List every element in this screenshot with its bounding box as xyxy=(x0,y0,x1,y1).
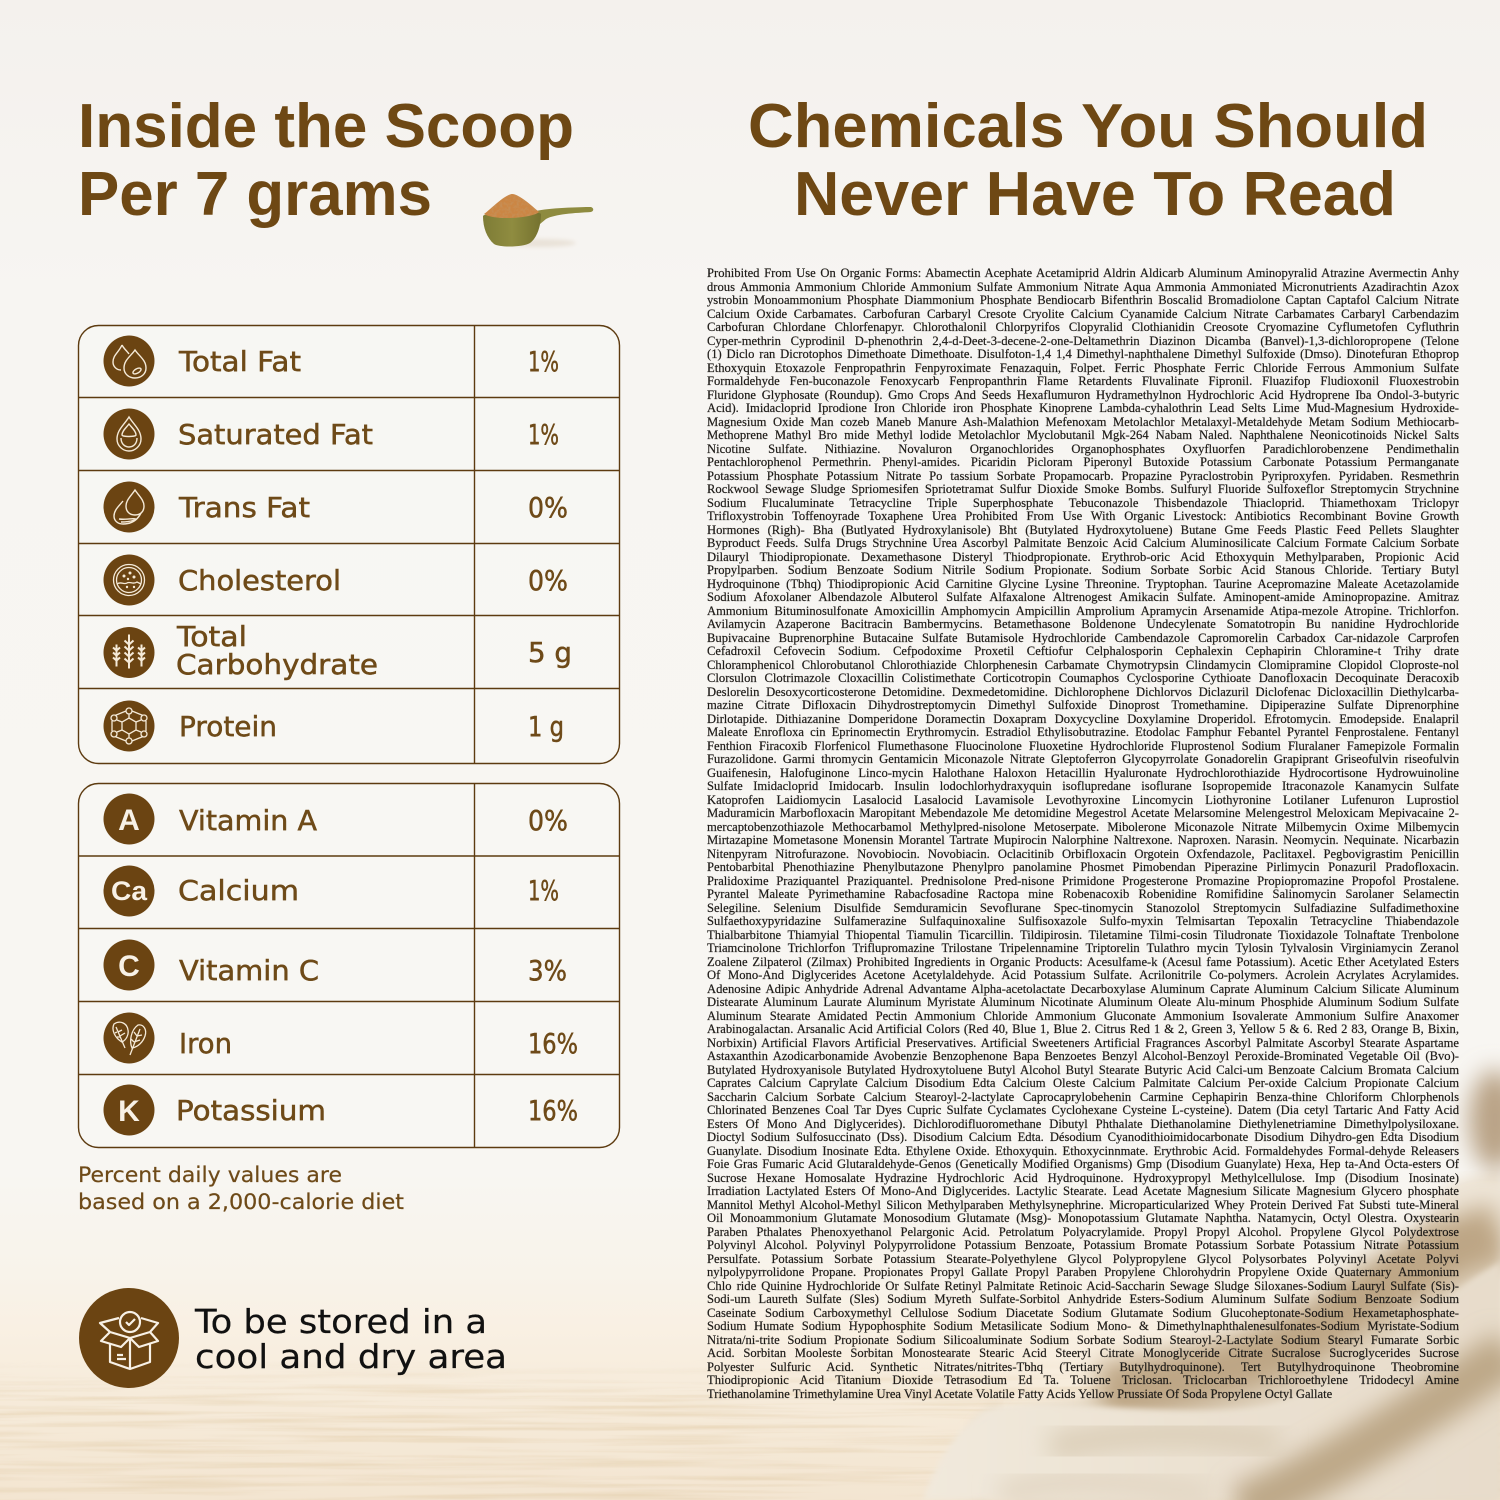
row: Total Carbohydrate xyxy=(104,621,572,681)
text block: prohibited chemicals list: Acid). Imidacloprid Iprodione Iron Chloride iron Phosphate Kinoprene Lambda-cyhalothrin Lead Selts Lime Mud-Magnesium Hydroxide- xyxy=(707,401,1459,415)
text block: prohibited chemicals list: Dioctyl Sodium Sulfosuccinato (Dss). Disodium Calcium Edta. Désodium Cyanodithioimidocarbonate Disodium Dihydro-gen Edta Disodium xyxy=(707,1130,1459,1144)
text block: prohibited chemicals list: Nitenpyram Nitrofurazone. Novobiocin. Novobiacin. Oclacitinib Orbifloxacin Orgotein Oxfendazole, Paclitaxel. Pegbovigrastim Penicillin xyxy=(707,846,1459,860)
text block: prohibited chemicals list: Guaifenesin, Halofuginone Linco-mycin Halothane Haloxon Hetacillin Hyaluronate Hydrochlorothiazide Hydrocortisone Hydrowuinoline xyxy=(707,766,1459,780)
text block: prohibited chemicals list: Carbofuran Chlordane Chlorfenapyr. Chlorothalonil Chlorpyrifos Clopyralid Clothianidin Creosote Cryomazine Cyflumetofen Cyfluthrin xyxy=(707,320,1459,334)
row: Protein: Protein xyxy=(179,711,277,743)
text block: prohibited chemicals list: Furazolidone. Garmi thromycin Gentamicin Miconazole Nitrate Gleptoferron Glycopyrrolate Gonadorelin Grapiprant Griseofulvin riseofulvin xyxy=(707,752,1459,766)
row: Vitamin A: 0% xyxy=(528,805,568,837)
row: Calcium: Ca xyxy=(111,876,148,906)
text block: prohibited chemicals list: Caprates Calcium Caprylate Calcium Disodium Edta Calcium Oleste Calcium Palmitate Calcium Per-oxide Calcium Propionate Calcium xyxy=(707,1076,1459,1090)
text block: prohibited chemicals list: (1) Diclo ran Dicrotophos Dimethoate Dimethoate. Disulfoton-1,4 1,4 Dimethyl-naphthalene Dimethyl Sulfoxide (Dmso). Dinotefuran Ethoprop xyxy=(707,347,1459,361)
text block: prohibited chemicals list: Chlo ride Quinine Hydrochloride Or Sulfate Retinyl Palmitate Retinoic Acid-Saccharin Sewage Sludge Siloxanes-Sodium Lauryl Sulfate (Sis)- xyxy=(707,1278,1459,1292)
text block: prohibited chemicals list: Adenosine Adipic Anhydride Adrenal Advantame Alpha-acetolactate Decarboxylase Aluminum Caprate Aluminum Calcium Silicate Aluminum xyxy=(707,982,1459,996)
text block: prohibited chemicals list: Caseinate Sodium Carboxymethyl Cellulose Sodium Diacetate Sodium Glutamate Sodium Glucoheptonate-Sodium Hexametaphosphate- xyxy=(707,1306,1459,1320)
text block: prohibited chemicals list: Foie Gras Fumaric Acid Glutaraldehyde-Genos (Genetically Modified Organisms) Gmp (Disodium Guanylate) Hexa, Hep ta-And Octa-esters Of xyxy=(707,1157,1459,1171)
text block: prohibited chemicals list: Norbixin) Artificial Flavors Artificial Preservatives. Artificial Sweeteners Artificial Fragrances Ascorbyl Palmitate Ascorbyl Stearate Aspartame xyxy=(707,1036,1459,1050)
row: Vitamin C: Vitamin C xyxy=(179,955,319,987)
text block: prohibited chemicals list: Pralidoxime Praziquantel Praziquantel. Prednisolone Pred-nisone Primidone Progesterone Promazine Propiopromazine Propofol Prostalene. xyxy=(707,874,1459,888)
row: Total Fat: Total Fat xyxy=(178,346,301,378)
row: Vitamin C: 3% xyxy=(528,955,567,987)
row: Iron: 16% xyxy=(528,1028,578,1060)
text block: prohibited chemicals list: Pentobarbital Phenothiazine Phenylbutazone Phenylpro panolamine Phosmet Pimobendan Piperazine Pirlimycin Ponazuril Pradofloxacin. xyxy=(707,860,1459,874)
text block: prohibited chemicals list: Potassium Phosphate Potassium Nitrate Po tassium Sorbate Propamocarb. Propazine Pyraclostrobin Pyriproxyfen. Pyridaben. Resmethrin xyxy=(707,468,1459,482)
text block: prohibited chemicals list: Polyester Sulfuric Acid. Synthetic Nitrates/nitrites-Tbhq (Tertiary Butylhydroquinone). Tert Butylhydroquinone Theobromine xyxy=(707,1360,1459,1374)
row: Cholesterol: 0% xyxy=(528,565,568,597)
text block: prohibited chemicals list: Distearate Aluminum Laurate Aluminum Myristate Aluminum Nicotinate Aluminum Oleate Alu-minum Phosphide Aluminum Sodium Sulfate xyxy=(707,995,1459,1009)
row: Trans Fat: 0% xyxy=(528,492,568,524)
text block: prohibited chemicals list: drous Ammonia Ammonium Chloride Ammonium Sulfate Ammonium Nitrate Aqua Ammonia Ammoniated Micronutrients Azadirachtin Azox xyxy=(707,280,1459,294)
text block: prohibited chemicals list: Sulfaethoxypyridazine Sulfamerazine Sulfaquinoxaline Sulfisoxazole Sulfo-myxin Telmisartan Tepoxalin Tetracycline Thiabendazole xyxy=(707,914,1459,928)
storage instruction text: To be stored in a xyxy=(194,1302,487,1341)
row: Protein: 1 g xyxy=(528,711,564,743)
text block: prohibited chemicals list: Calcium Oxide Carbamates. Carbofuran Carbaryl Cresote Cryolite Calcium Cyanamide Calcium Nitrate Carbamates Carbaryl Carbendazim xyxy=(707,306,1459,320)
row: Potassium xyxy=(104,1084,578,1136)
text block: prohibited chemicals list: ystrobin Monoammonium Phosphate Diammonium Phosphate Bendiocarb Bifenthrin Boscalid Bromadiolone Captan Captafol Calcium Nitrate xyxy=(707,293,1459,307)
row: Saturated Fat: 1% xyxy=(528,419,559,451)
text block: prohibited chemicals list: Cyper-methrin Cyprodinil D-phenothrin 2,4-d-Deet-3-decene-2-one-Deltamethrin Diazinon Dicamba (Banvel)-1,3-dichloropropene (Telone xyxy=(707,334,1459,348)
row: Total Carbohydrate: Total xyxy=(176,621,247,653)
text block: prohibited chemicals list: Sodi-um Laureth Sulfate (Sles) Sodium Myreth Sulfate-Sorbitol Anhydride Esters-Sodium Aluminum Sulfate Sodium Benzoate Sodium xyxy=(707,1292,1459,1306)
text block: prohibited chemicals list: Esters Of Mono And Diglycerides). Dichlorodifluoromethane Dibutyl Phthalate Diethanolamine Diethylenetriamine Dimethylpolysiloxane. xyxy=(707,1116,1459,1130)
text block: prohibited chemicals list: Fluridone Glyphosate (Roundup). Gmo Crops And Seeds Hexaflumuron Hydramethylnon Hydrochloric Acid Hydroprene Iba Ondol-3-butyric xyxy=(707,388,1459,402)
text block: prohibited chemicals list: Irradiation Lactylated Esters Of Mono-And Diglycerides. Lactylic Stearate. Lead Acetate Magnesium Silicate Magnesium Glycero phosphate xyxy=(707,1184,1459,1198)
text block: prohibited chemicals list: Hydroquinone (Tbhq) Thiodipropionic Acid Carnitine Glycine Lysine Threonine. Tryptophan. Taurine Acepromazine Maleate Acetazolamide xyxy=(707,576,1459,590)
icon: open box with checkmark xyxy=(79,1288,179,1388)
background: cream wall, wood table and blanket xyxy=(0,1058,1500,1500)
text block: prohibited chemicals list: Aluminum Stearate Amidated Pectin Ammonium Chloride Ammonium Gluconate Ammonium Isovalerate Ammonium Sulfire Anaxomer xyxy=(707,1008,1459,1022)
text block: prohibited chemicals list: Sodium Afoxolaner Albendazole Albuterol Sulfate Alfaxalone Altrenogest Amikacin Sulfate. Aminopent-amide Aminopropazine. Amitraz xyxy=(707,590,1459,604)
row: Vitamin A xyxy=(104,794,568,844)
row: Calcium: 1% xyxy=(528,875,559,907)
text block: prohibited chemicals list: Selegiline. Selenium Disulfide Semduramicin Sevoflurane Spec-tinomycin Stanozolol Streptomycin Sulfadiazine Sulfadimethoxine xyxy=(707,900,1459,914)
text block: prohibited chemicals list: Hormones (Righ)- Bha (Butlyated Hydroxylanisole) Bht (Butylated Hydroxytoluene) Butane Gme Feeds Plastic Feed Pellets Slaughter xyxy=(707,522,1459,536)
text block: prohibited chemicals list: Formaldehyde Fen-buconazole Fenoxycarb Fenpropanthrin Flame Retardents Fluvalinate Fipronil. Fluazifop Fludioxonil Fluoxestrobin xyxy=(707,374,1459,388)
text block: prohibited chemicals list: Trifloxystrobin Toffenoyrade Toxaphene Urea Prohibited From Use With Organic Livestock: Antibiotics Recombinant Bovine Growth xyxy=(707,509,1459,523)
row: Vitamin C: C xyxy=(118,950,140,983)
row: Vitamin A: A xyxy=(118,804,140,837)
text block: prohibited chemicals list: Cefadroxil Cefovecin Sodium. Cefpodoxime Proxetil Ceftiofur Celphalosporin Cephalexin Cephapirin Chloramine-t Trihy drate xyxy=(707,644,1459,658)
row: Protein xyxy=(104,700,564,752)
row: Total Fat: 1% xyxy=(528,346,559,378)
storage instruction text xyxy=(194,1302,507,1376)
text block: prohibited chemicals list: Pentachlorophenol Permethrin. Phenyl-amides. Picaridin Picloram Piperonyl Butoxide Potassium Carbonate Potassium Permanganate xyxy=(707,455,1459,469)
text block: prohibited chemicals list: Astaxanthin Azodicarbonamide Avobenzie Benzophenone Bapa Benzoetes Benzyl Alcohol-Benzoyl Peroxide-Brominated Vegetable Oil (Bvo)- xyxy=(707,1049,1459,1063)
text block: prohibited chemicals list: mercaptobenzothiazole Methocarbamol Methylpred-nisolone Metoserpate. Mibolerone Miconazole Nitrate Milbemycin Oxime Milbemycin xyxy=(707,820,1459,834)
heading: Inside the Scoop: Inside the Scoop xyxy=(78,92,574,161)
heading: Chemicals You Should Never Have To Read xyxy=(748,92,1428,229)
text block: prohibited chemicals list: Triethanolamine Trimethylamine Urea Vinyl Acetate Volatile Fatty Acids Yellow Prussiate Of Soda Propylene Octyl Gallate xyxy=(707,1386,1332,1400)
text block: prohibited chemicals list xyxy=(707,266,1460,1401)
text block: prohibited chemicals list: Nitrata/ni-trite Sodium Propionate Sodium Silicoaluminate Sodium Sorbate Sodium Stearoyl-2-Lactylate Sodium Stearyl Fumarate Sorbic xyxy=(707,1332,1459,1346)
text block: prohibited chemicals list: Butylated Hydroxyanisole Butylated Hydroxytoluene Butyl Alcohol Butyl Stearate Butyric Acid Calci-um Benzoate Calcium Bromata Calcium xyxy=(707,1062,1459,1076)
row: Iron: Iron xyxy=(179,1028,232,1060)
storage instruction text: cool and dry area xyxy=(195,1337,507,1376)
row: Saturated Fat xyxy=(104,408,559,460)
footnote: percent daily values: based on a 2,000-calorie diet xyxy=(78,1190,404,1215)
text block: prohibited chemicals list: Guanylate. Disodium Inosinate Edta. Ethylene Oxide. Ethoxyquin. Ethoxycinnmate. Erythrobic Acid. Formaldehydes Formal-dehyde Releasers xyxy=(707,1144,1459,1158)
heading: Inside the Scoop: Per 7 grams xyxy=(78,160,432,229)
row: Potassium: K xyxy=(118,1095,140,1128)
text block: prohibited chemicals list: Of Mono-And Diglycerides Acetone Acetylaldehyde. Acid Potassium Sulfate. Acrilonitrile Co-polymers. Acrolein Acrylates Acrylamides. xyxy=(707,968,1459,982)
text block: prohibited chemicals list: Oil Monoammonium Glutamate Monosodium Glutamate (Msg)- Monopotassium Glutamate Naphtha. Natamycin, Octyl Olestra. Oxystearin xyxy=(707,1211,1459,1225)
text block: prohibited chemicals list: Rockwool Sewage Sludge Spriomesifen Spriotetramat Sulfur Dioxide Smoke Bombs. Sulfuryl Fluoride Sulfoxeflor Streptomycin Strychnine xyxy=(707,482,1459,496)
text block: prohibited chemicals list: Thiodipropionic Acid Titanium Dioxide Tetrasodium Ed Ta. Toluene Triclosan. Triclocarban Trichloroethylene Tridodecyl Amine xyxy=(707,1373,1459,1387)
text block: prohibited chemicals list: Bupivacaine Buprenorphine Butacaine Sulfate Butamisole Hydrochloride Cambendazole Capromorelin Carbadox Car-nidazole Carprofen xyxy=(707,630,1459,644)
heading: Chemicals You Should Never Have To Read: Chemicals You Should xyxy=(748,92,1428,161)
text block: prohibited chemicals list: Chlorinated Benzenes Coal Tar Dyes Cupric Sulfate Cyclamates Cyclohexane Cysteine L-cysteine). Datem (Dia cetyl Tartaric And Fatty Acid xyxy=(707,1103,1459,1117)
row: Calcium: Calcium xyxy=(178,875,299,907)
text block: prohibited chemicals list: Acid. Sorbitan Mooleste Sorbitan Monostearate Stearic Acid Steeryl Citrate Monoglyceride Citrate Sucralose Sucroglycerides Sucrose xyxy=(707,1346,1459,1360)
text block: prohibited chemicals list: Dilauryl Thiodipropionate. Dexamethasone Disteryl Thiodpropionate. Erythrob-oric Acid Ethoxyquin Methylparaben, Propionic Acid xyxy=(707,550,1459,564)
text block: prohibited chemicals list: Sulfate Imidacloprid Imidocarb. Insulin lodochlorhydraxyquin isoflupredane isoflurane Isopropemide Itraconazole Kanamycin Sulfate xyxy=(707,779,1459,793)
text block: prohibited chemicals list: Katoprofen Laidiomycin Lasalocid Lasalocid Lavamisole Levothyroxine Lincomycin Liothyronine Lotilaner Lufenuron Luprostiol xyxy=(707,792,1459,806)
text block: prohibited chemicals list: Avilamycin Azaperone Bacitracin Bambermycins. Betamethasone Boldenone Undecylenate Somatotropin Bu nanidine Hydrochloride xyxy=(707,617,1459,631)
text block: prohibited chemicals list: mazine Citrate Difloxacin Dihydrostreptomycin Dimethyl Sulfoxide Dinoprost Tromethamine. Dipiperazine Sulfate Diprenorphine xyxy=(707,698,1459,712)
text block: prohibited chemicals list: Maduramicin Marbofloxacin Maropitant Mebendazole Me detomidine Megestrol Acetate Melarsomine Melengestrol Meloxicam Mepivacaine 2- xyxy=(707,806,1459,820)
row: Cholesterol: Cholesterol xyxy=(178,565,341,597)
text block: prohibited chemicals list: Polyvinyl Alcohol. Polyvinyl Polypyrrolidone Potassium Benzoate, Potassium Bromate Potassium Sorbate Potassium Nitrate Potassium xyxy=(707,1238,1459,1252)
text block: prohibited chemicals list: Ammonium Bituminosulfonate Amoxicillin Amphomycin Ampicillin Amprolium Apramycin Arsenamide Atipa-mezole Atropine. Trichlorfon. xyxy=(707,604,1459,618)
text block: prohibited chemicals list: Fenthion Firacoxib Florfenicol Flumethasone Fluocinolone Fluoxetine Hydrochloride Fluprostenol Sodium Fluralaner Famepizole Formalin xyxy=(707,738,1459,752)
text block: prohibited chemicals list: Dirlotapide. Dithiazanine Domperidone Doramectin Doxapram Doxycycline Doxylamine Droperidol. Efrotomycin. Emodepside. Enalapril xyxy=(707,712,1459,726)
text block: prohibited chemicals list: Prohibited From Use On Organic Forms: Abamectin Acephate Acetamiprid Aldrin Aldicarb Aluminum Aminopyralid Atrazine Avermectin Anhy xyxy=(707,266,1459,280)
icon: measuring scoop of powder xyxy=(483,194,593,247)
text block: prohibited chemicals list: nylpolypyrrolidone Propane. Propionates Propyl Gallate Propyl Paraben Propylene Chlorohydrin Propylene Oxide Quaternary Ammonium xyxy=(707,1265,1459,1279)
row: Total Carbohydrate: Carbohydrate xyxy=(176,649,378,681)
text block: prohibited chemicals list: Sodium Humate Sodium Hypophosphite Sodium Metasilicate Sodium Mono- & Dimethylnaphthalenesulfonates-Sodium Myristate-Sodium xyxy=(707,1319,1459,1333)
row: Saturated Fat: Saturated Fat xyxy=(178,419,373,451)
text block: prohibited chemicals list: Maleate Enrofloxa cin Eprinomectin Erythromycin. Estradiol Ethylisobutrazine. Etodolac Famphur Febantel Pyrantel Fenprostalene. Fentanyl xyxy=(707,725,1459,739)
row: Trans Fat: Trans Fat xyxy=(178,492,310,524)
row: Trans Fat xyxy=(104,482,568,532)
text block: prohibited chemicals list: Nicotine Sulfate. Nithiazine. Novaluron Organochlorides Organophosphates Oxyfluorfen Paradichlorobenzene Pendimethalin xyxy=(707,442,1459,456)
row: Vitamin A: Vitamin A xyxy=(179,805,317,837)
text block: prohibited chemicals list: Magnesium Oxide Man cozeb Maneb Manure Ash-Malathion Mefenoxam Metolachlor Metalaxyl-Metaldehyde Metam Sodium Methiocarb- xyxy=(707,414,1459,428)
text block: prohibited chemicals list: Mirtazapine Mometasone Monensin Morantel Tartrate Mupirocin Nalorphine Naltrexone. Naproxen. Narasin. Neomycin. Nequinate. Nicarbazin xyxy=(707,833,1459,847)
text block: prohibited chemicals list: Ethoxyquin Etoxazole Fenpropathrin Fenpyroximate Fenazaquin, Folpet. Ferric Phosphate Ferric Chloride Ferrous Ammonium Sulfate xyxy=(707,360,1459,374)
text block: prohibited chemicals list: Sodium Flucaluminate Tetracycline Triple Superphosphate Tebuconazole Thisbendazole Thiacloprid. Thiamethoxam Triclopyr xyxy=(707,496,1459,510)
panel: vitamins and minerals table xyxy=(78,784,620,1148)
panel: macronutrients table xyxy=(78,326,620,764)
text block: prohibited chemicals list: Sucrose Hexane Homosalate Hydrazine Hydrochloric Acid Hydroquinone. Hydroxypropyl Methylcellulose. Imp (Disodium Inosinate) xyxy=(707,1170,1459,1184)
text block: prohibited chemicals list: Triamcinolone Trichlorfon Triflupromazine Trilostane Tripelennamine Triptorelin Tulathro mycin Tylosin Tylvalosin Virginiamycin Zeranol xyxy=(707,941,1459,955)
text block: prohibited chemicals list: Zoalene Zilpaterol (Zilmax) Prohibited Ingredients in Organic Products: Acesulfame-k (Acesul fame Potassium). Acetic Ether Acetylated Esters xyxy=(707,954,1459,968)
row: Potassium: Potassium xyxy=(176,1095,326,1127)
text block: prohibited chemicals list: Propylparben. Sodium Benzoate Sodium Nitrile Sodium Propionate. Sodium Sorbate Sorbic Acid Stanous Chloride. Tertiary Butyl xyxy=(707,563,1459,577)
row: Total Carbohydrate: 5 g xyxy=(528,637,572,669)
row: Potassium: 16% xyxy=(528,1095,578,1127)
row: Total Fat xyxy=(104,336,559,386)
row: Calcium xyxy=(104,866,559,916)
text block: prohibited chemicals list: Thialbarbitone Thiamyial Thiopental Tiamulin Ticarcillin. Tildipirosin. Tiletamine Tilmi-cosin Tiludronate Tioxidazole Tolnaftate Trenbolone xyxy=(707,928,1459,942)
text block: prohibited chemicals list: Saccharin Calcium Sorbate Calcium Stearoyl-2-lactylate Caprocaprylobehenin Carmine Cephapirin Benza-thine Chloriform Chlorphenols xyxy=(707,1090,1459,1104)
heading: Chemicals You Should Never Have To Read: Never Have To Read xyxy=(794,160,1396,229)
footnote: percent daily values xyxy=(78,1163,404,1215)
text block: prohibited chemicals list: Mannitol Methyl Alcohol-Methyl Silicon Methylparaben Methylsynephrine. Microparticularized Whey Protein Derived Fat Substi tute-Mineral xyxy=(707,1198,1459,1212)
heading: Inside the Scoop xyxy=(78,92,574,229)
text block: prohibited chemicals list: Chloramphenicol Chlorobutanol Chlorothiazide Chlorphenesin Carbamate Chymotrypsin Clindamycin Clomipramine Clopidol Cloproste-nol xyxy=(707,658,1459,672)
text block: prohibited chemicals list: Methoprene Mathyl Bro mide Methyl lodide Metolachlor Myclobutanil Mgk-264 Nabam Naled. Naphthalene Neonicotinoids Nickel Salts xyxy=(707,428,1459,442)
text block: prohibited chemicals list: Clorsulon Clotrimazole Cloxacillin Colistimethate Corticotropin Coumaphos Cyclosporine Cythioate Danofloxacin Decoquinate Deracoxib xyxy=(707,671,1459,685)
text block: prohibited chemicals list: Pyrantel Maleate Pyrimethamine Rabacfosadine Ractopa mine Robenacoxib Robenidine Romifidine Salinomycin Sarolaner Selamectin xyxy=(707,887,1459,901)
row: Cholesterol xyxy=(104,554,568,606)
text block: prohibited chemicals list: Arabinogalactan. Arsanalic Acid Artificial Colors (Red 40, Blue 1, Blue 2. Citrus Red 1 & 2, Green 3, Yellow 5 & 6. Red 2 83, Orange B, Bixin, xyxy=(707,1022,1459,1036)
text block: prohibited chemicals list: Persulfate. Potassium Sorbate Potassium Stearate-Polyethylene Glycol Polypropylene Glycol Polysorbates Polyvinyl Acetate Polyvi xyxy=(707,1252,1459,1266)
text block: prohibited chemicals list: Paraben Pthalates Phenoxyethanol Pelargonic Acid. Petrolatum Polyacrylamide. Propyl Propyl Alcohol. Propylene Glycol Polydextrose xyxy=(707,1224,1459,1238)
footnote: percent daily values: Percent daily values are xyxy=(78,1163,342,1188)
text block: prohibited chemicals list: Byproduct Feeds. Sulfa Drugs Strychnine Urea Ascorbyl Palmitate Benzoic Acid Calcium Aluminosilicate Calcium Formate Calcium Sorbate xyxy=(707,536,1459,550)
row: Vitamin C xyxy=(104,940,567,990)
row: Iron xyxy=(104,1012,578,1064)
text block: prohibited chemicals list: Deslorelin Desoxycorticosterone Detomidine. Dexmedetomidine. Dichlorophene Dichlorvos Diclazuril Diclofenac Dicloxacillin Diethylcarba- xyxy=(707,684,1459,698)
